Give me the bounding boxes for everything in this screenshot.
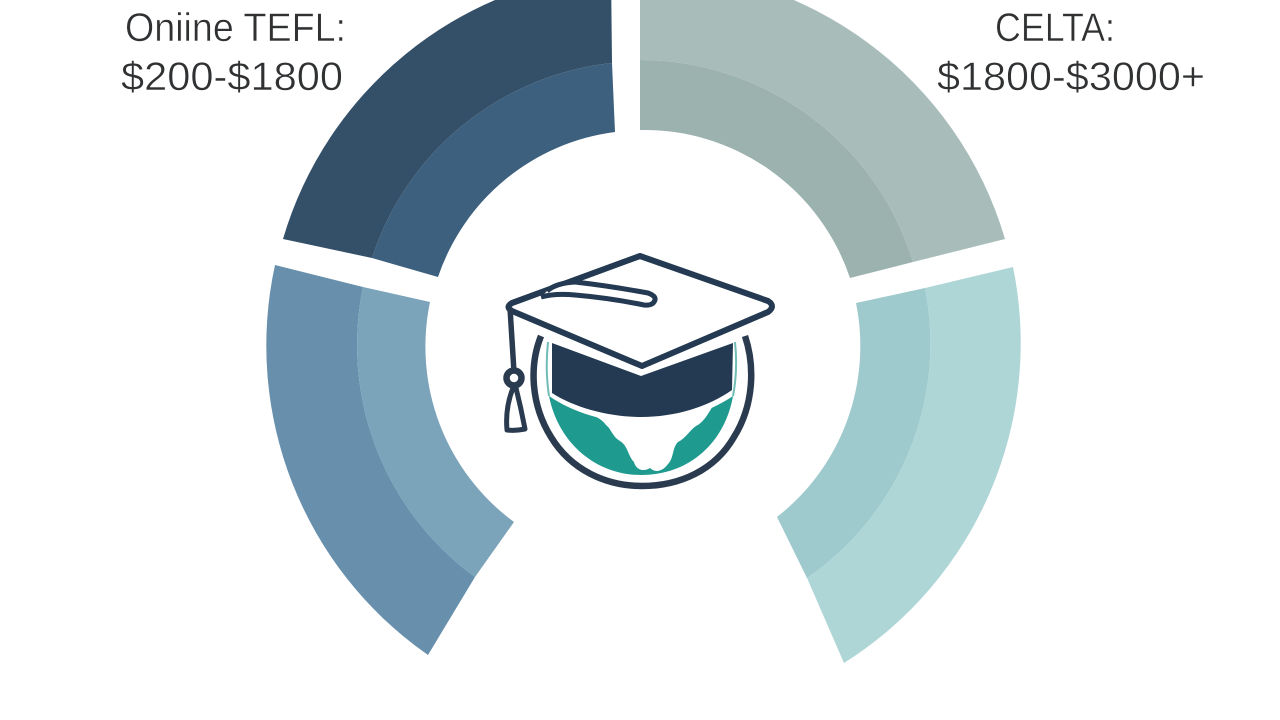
tassel <box>507 388 525 430</box>
label: Online TEFL price: Oniine TEFL: <box>125 6 346 50</box>
segment: lower-left steel blue <box>266 265 514 655</box>
label: CELTA price <box>937 6 1205 99</box>
label: Online TEFL price: $200-$1800 <box>121 55 343 99</box>
globe dark upper band <box>552 343 733 417</box>
cap fold <box>541 282 655 305</box>
cap board <box>508 256 772 366</box>
tassel cord <box>510 308 514 372</box>
label: Online TEFL price <box>121 6 346 99</box>
label: CELTA price: $1800-$3000+ <box>937 55 1205 99</box>
label: CELTA price: CELTA: <box>995 6 1115 50</box>
segment: top-left dark blue <box>283 0 615 277</box>
segment: top-right grey green <box>640 0 1005 278</box>
globe teal fill <box>549 396 733 475</box>
icon: graduation cap on globe <box>506 256 772 486</box>
globe teal side lines <box>547 342 736 396</box>
globe ring <box>534 336 751 486</box>
globe white continent <box>584 404 714 471</box>
tassel knot <box>506 370 522 386</box>
segment: lower-right pale teal <box>777 267 1021 663</box>
